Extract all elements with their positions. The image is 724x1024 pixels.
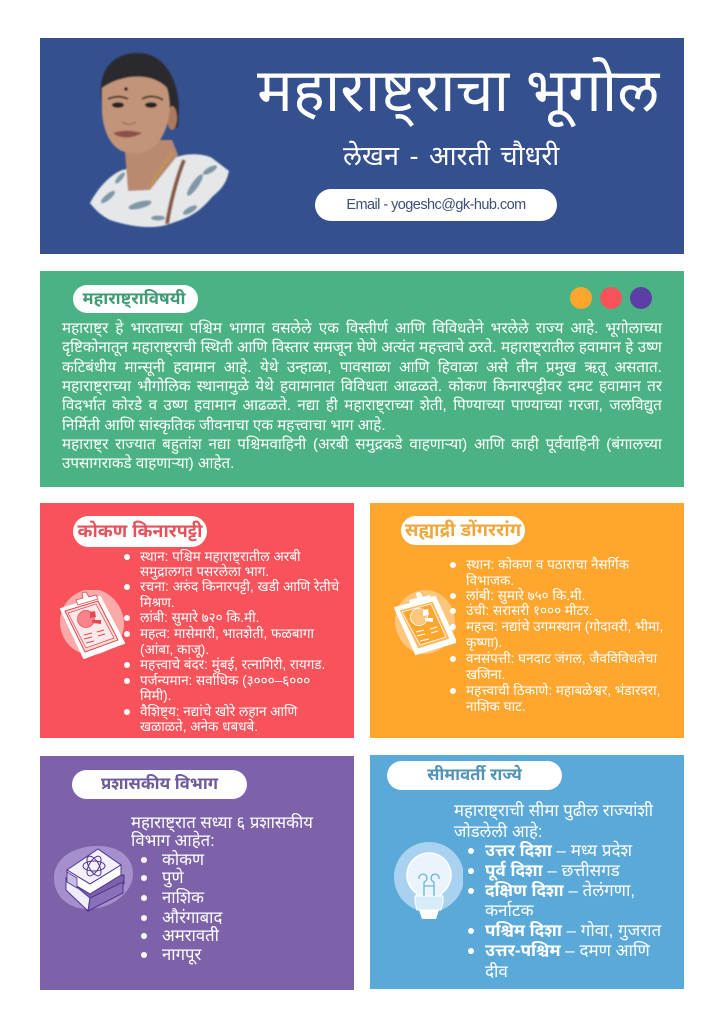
- body paragraph: पश्चिम: [190, 320, 222, 337]
- body paragraph: पाण्याच्या: [511, 397, 562, 414]
- icon: clipboard with pie chart: [394, 590, 456, 656]
- author byline: लेखन - आरती चौधरी: [343, 141, 559, 171]
- border direction list: पश्चिम दिशा – गोवा, गुजरात: [485, 921, 661, 940]
- bullet list: महत्त्वाची ठिकाणे: महाबळेश्वर, भंडारदरा,: [466, 683, 660, 698]
- division list: [141, 850, 223, 964]
- body paragraph: प्रमुख: [546, 359, 576, 376]
- body paragraph: राज्य: [536, 320, 563, 337]
- heading pill: [72, 770, 247, 799]
- division list: नागपूर: [162, 945, 201, 964]
- body paragraph: (अरबी: [313, 436, 348, 453]
- panel: header: [40, 38, 684, 254]
- bullet list: [450, 556, 663, 714]
- bullet list: विभाजक.: [466, 573, 514, 588]
- body paragraph: जलविद्युत: [609, 397, 662, 414]
- intro text: महाराष्ट्राची सीमा पुढील राज्यांशी: [454, 801, 653, 820]
- panel: Sahyadri range: [370, 503, 684, 738]
- title: महाराष्ट्राचा भूगोल: [257, 57, 659, 124]
- bullet list: उंची: सरासरी १००० मीटर.: [466, 603, 592, 618]
- body paragraph: विस्तार: [272, 339, 309, 356]
- body paragraph: एक: [319, 320, 339, 337]
- heading pill: प्रशासकीय विभाग: [101, 774, 218, 793]
- body paragraph: समजून: [313, 339, 352, 356]
- body paragraph: पिण्याच्या: [453, 397, 504, 414]
- body paragraph: आणि: [474, 436, 504, 453]
- body paragraph: महाराष्ट्राच्या: [344, 397, 413, 414]
- bullet list: रचना: अरुंद किनारपट्टी, खडी आणि रेतीचे: [140, 579, 339, 594]
- body paragraph: आणि: [395, 320, 425, 337]
- heading pill: सह्याद्री डोंगररांग: [405, 519, 521, 540]
- heading pill: सीमावर्ती राज्ये: [427, 765, 522, 784]
- bullet list: महत्त्वाचे बंदर: मुंबई, रत्नागिरी, रायगड.: [140, 657, 325, 672]
- body paragraph: काही: [511, 436, 539, 453]
- body paragraph: ठरते.: [469, 339, 497, 356]
- panel: bordering states: जोडलेली आहे:: [454, 822, 542, 841]
- body paragraph: ही: [326, 397, 338, 414]
- body paragraph: पावसाळा: [340, 359, 391, 376]
- body paragraph: समुद्रकडे: [355, 436, 402, 453]
- heading pill: महाराष्ट्राविषयी: [82, 289, 186, 308]
- body paragraph: ऋतू: [584, 359, 606, 376]
- panel: administrative divisions: विभाग आहेत:: [131, 831, 215, 850]
- heading pill: [387, 761, 562, 790]
- body paragraph: भारताच्या: [131, 320, 183, 337]
- bullet list: पर्जन्यमान: सर्वाधिक (३०००–६०००: [140, 673, 310, 688]
- body paragraph: हवामान: [173, 359, 215, 376]
- body paragraph: नद्या: [209, 436, 230, 453]
- heading pill: [73, 285, 198, 313]
- body paragraph: मान्सूनी: [124, 359, 165, 376]
- bullet list: कृष्णा).: [466, 635, 502, 650]
- border direction list: उत्तर दिशा – मध्य प्रदेश: [485, 841, 632, 860]
- bullet list: लांबी: सुमारे ७५० कि.मी.: [466, 588, 585, 603]
- body paragraph: उपसागराकडे वाहणाऱ्या) आहेत.: [62, 455, 234, 472]
- border direction list: [468, 840, 662, 981]
- body paragraph: व: [149, 397, 157, 414]
- bullet list: स्थान: पश्चिम महाराष्ट्रातील अरबी: [140, 549, 301, 564]
- body paragraph: तीन: [516, 359, 537, 376]
- body paragraph: असे: [486, 359, 508, 376]
- body paragraph: वसलेले: [272, 320, 312, 337]
- bullet list: मिमी).: [140, 688, 171, 703]
- division list: पुणे: [162, 868, 184, 887]
- bullet list: खळाळते, अनेक धबधबे.: [140, 719, 258, 734]
- bullet list: स्थान: कोकण व पठाराचा नैसर्गिक: [466, 557, 629, 572]
- heading pill: [401, 516, 525, 545]
- body paragraph: हे: [115, 320, 123, 337]
- body paragraph: घेणे: [357, 339, 377, 356]
- body paragraph: उन्हाळा,: [287, 359, 331, 376]
- body paragraph: हिवाळा: [438, 359, 478, 376]
- body paragraph: महाराष्ट्र: [62, 320, 108, 337]
- border direction list: कर्नाटक: [485, 901, 534, 920]
- body paragraph: तर: [647, 378, 662, 395]
- orange, red and purple dots: [570, 287, 652, 309]
- body paragraph: कटिबंधीय: [62, 359, 116, 376]
- body paragraph: येथे: [260, 359, 278, 376]
- body paragraph: विदर्भात: [62, 397, 106, 414]
- body paragraph: विस्तीर्ण: [346, 320, 388, 337]
- bullet list: मिश्रण.: [140, 595, 175, 610]
- body paragraph: आणि: [399, 359, 429, 376]
- body paragraph: हे: [625, 339, 633, 356]
- bullet list: वनसंपत्ती: घनदाट जंगल, जैवविविधतेचा: [466, 651, 657, 666]
- body paragraph: भरलेले: [491, 320, 529, 337]
- body paragraph: भूगोलाच्या: [605, 320, 662, 337]
- intro text: महाराष्ट्रात सध्या ६ प्रशासकीय: [131, 813, 313, 832]
- body paragraph: भागात: [229, 320, 265, 337]
- division list: नाशिक: [162, 888, 204, 907]
- body paragraph: दमट: [568, 378, 593, 395]
- bullet list: खजिना.: [466, 667, 505, 682]
- email pill: Email - yogeshc@gk-hub.com: [346, 197, 526, 213]
- body paragraph: स्थिती: [201, 339, 232, 356]
- bullet list: वैशिष्ट्य: नद्यांचे खोरे लहान आणि: [140, 704, 297, 719]
- border direction list: उत्तर-पश्चिम – दमण आणि: [485, 941, 650, 960]
- body paragraph: पूर्ववाहिनी: [546, 436, 599, 453]
- body paragraph: विविधतेने: [432, 320, 484, 337]
- bullet list: लांबी: सुमारे ७२० कि.मी.: [140, 610, 259, 625]
- body paragraph: महाराष्ट्राची: [132, 339, 196, 356]
- body paragraph: वाहणाऱ्या): [409, 436, 467, 453]
- icon: clipboard with pie chart: [60, 590, 126, 660]
- body paragraph: स्थानामुळे: [197, 378, 249, 395]
- body paragraph: निर्मिती आणि सांस्कृतिक जीवनाचा एक महत्त्वाचा भाग आहे.: [62, 416, 386, 434]
- body paragraph: नद्या: [297, 397, 319, 414]
- heading pill: [73, 516, 207, 547]
- body paragraph: आहे.: [224, 359, 252, 376]
- body paragraph: शेती,: [420, 397, 447, 414]
- icon: light bulb: [394, 842, 463, 919]
- icon: stack of books: [54, 846, 133, 912]
- body paragraph: (बंगालच्या: [606, 436, 662, 453]
- panel: bordering states: [370, 755, 684, 989]
- portrait photo of author: [89, 52, 230, 228]
- body paragraph: बहुतांश: [162, 436, 202, 453]
- division list: औरंगाबाद: [162, 908, 222, 927]
- email pill: [315, 189, 557, 221]
- panel: Konkan coast: [40, 503, 354, 738]
- body paragraph: हवामान: [579, 339, 621, 356]
- division list: कोकण: [162, 850, 204, 869]
- bullet list: [124, 549, 340, 734]
- bullet list: समुद्रालगत पसरलेला भाग.: [140, 564, 269, 579]
- bullet list: महत्त्व: नद्यांचे उगमस्थान (गोदावरी, भीमा,: [466, 619, 663, 634]
- body paragraph: हवामान: [599, 378, 641, 395]
- body paragraph: गरजा,: [569, 397, 603, 414]
- body paragraph: महाराष्ट्रातील: [501, 339, 574, 356]
- body paragraph: आणि: [237, 339, 267, 356]
- body paragraph: हवामान: [194, 397, 236, 414]
- border direction list: दक्षिण दिशा – तेलंगणा,: [485, 881, 635, 900]
- body paragraph: कोकण: [448, 378, 487, 395]
- body paragraph: उष्ण: [163, 397, 188, 414]
- body paragraph: महत्त्वाचे: [419, 339, 464, 356]
- body paragraph: असतात.: [614, 359, 662, 376]
- body paragraph: भौगोलिक: [137, 378, 191, 395]
- bullet list: महत्व: मासेमारी, भातशेती, फळबागा: [140, 626, 314, 641]
- panel: about Maharashtra: [40, 271, 684, 487]
- body paragraph: हवामानात: [280, 378, 334, 395]
- bullet list: नाशिक घाट.: [466, 699, 526, 714]
- border direction list: दीव: [485, 962, 508, 981]
- body paragraph: महाराष्ट्राच्या: [62, 378, 131, 395]
- body paragraph: पश्चिमवाहिनी: [237, 436, 306, 453]
- heading pill: कोकण किनारपट्टी: [78, 521, 202, 541]
- body paragraph: अत्यंत: [381, 339, 415, 356]
- body paragraph: उष्ण: [638, 339, 662, 356]
- bullet list: (आंबा, काजू).: [140, 642, 209, 657]
- body paragraph: दृष्टिकोनातून: [62, 339, 128, 356]
- body paragraph: [62, 319, 662, 472]
- body paragraph: महाराष्ट्र: [62, 436, 108, 453]
- body paragraph: राज्यात: [115, 436, 155, 453]
- panel: administrative divisions: [40, 756, 354, 990]
- body paragraph: किनारपट्टीवर: [493, 378, 562, 395]
- body paragraph: विविधता: [341, 378, 387, 395]
- body paragraph: आहे.: [571, 320, 598, 337]
- body paragraph: येथे: [255, 378, 274, 395]
- body paragraph: आढळते.: [242, 397, 291, 414]
- body paragraph: आढळते.: [394, 378, 442, 395]
- border direction list: पूर्व दिशा – छत्तीसगड: [485, 861, 620, 880]
- body paragraph: कोरडे: [112, 397, 142, 414]
- division list: अमरावती: [162, 926, 219, 945]
